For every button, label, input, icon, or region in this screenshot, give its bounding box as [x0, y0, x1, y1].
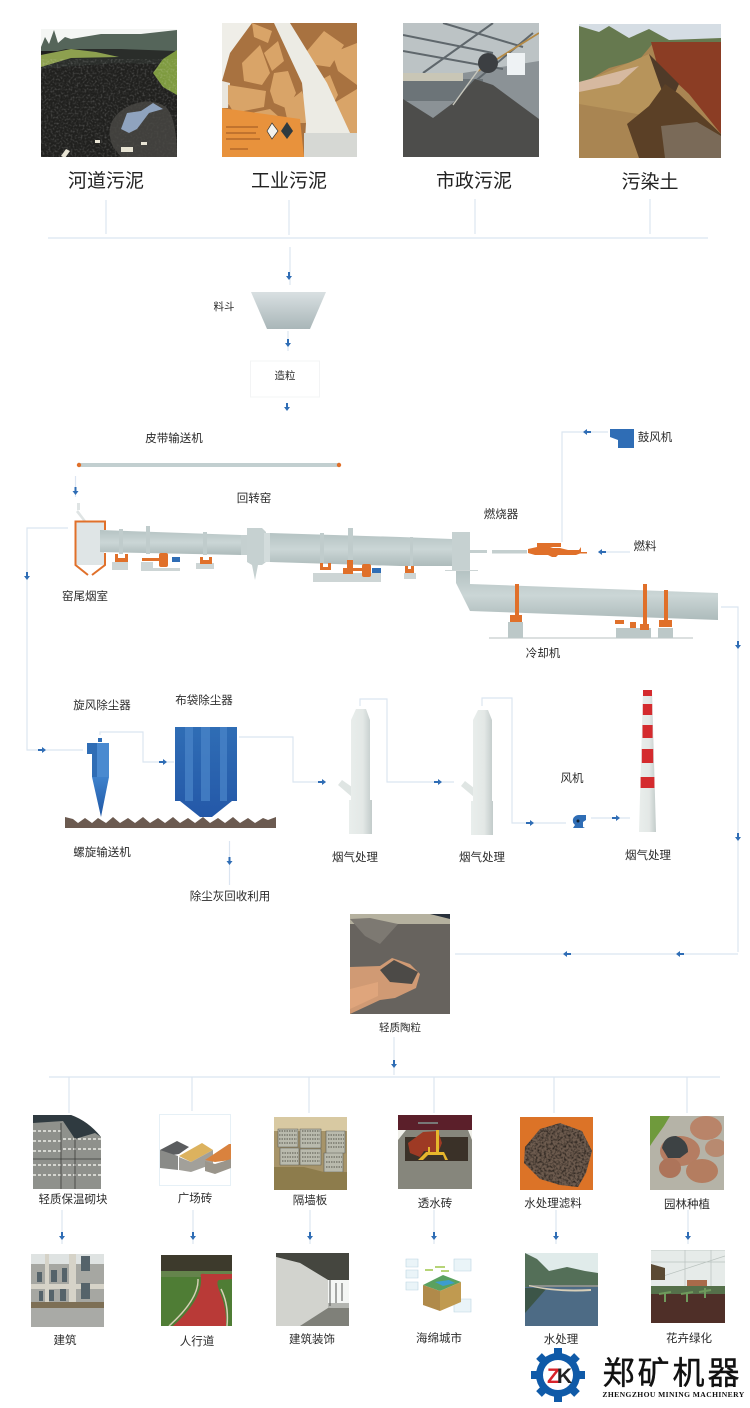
label: screw conveyor: 螺旋输送机	[73, 845, 131, 859]
connector: tower 1 to tower 2	[360, 699, 454, 785]
label: flue gas treatment 2: 烟气处理	[459, 850, 505, 864]
label: flue gas treatment 3: 烟气处理	[625, 848, 671, 862]
icon: gear with ZK	[531, 1348, 585, 1402]
label: insulation block: 轻质保温砌块	[38, 1192, 108, 1206]
label: bag filter: 布袋除尘器	[175, 693, 233, 707]
blower	[610, 429, 634, 448]
english wordmark: ZHENGZHOU MINING MACHINERY	[602, 1390, 745, 1399]
rotary kiln	[100, 526, 470, 582]
label: rotary kiln: 回转窑	[237, 491, 271, 505]
photo: building	[31, 1254, 104, 1327]
granulator box: 造粒	[274, 369, 296, 382]
label: filter media: 水处理滤料	[524, 1196, 582, 1210]
screw conveyor	[65, 817, 276, 828]
connector: smoke chamber to cyclone	[24, 528, 83, 753]
label: building decoration: 建筑装饰	[289, 1332, 335, 1346]
photo: lightweight ceramsite	[350, 914, 450, 1014]
belt conveyor	[77, 463, 341, 467]
label: cyclone dust collector: 旋风除尘器	[73, 698, 131, 712]
diagram: sponge city	[406, 1258, 472, 1312]
label: permeable brick: 透水砖	[418, 1196, 453, 1210]
photo: river sludge	[41, 29, 177, 157]
arrow: fuel to burner	[598, 549, 630, 555]
label: sidewalk: 人行道	[180, 1334, 215, 1348]
burner	[470, 543, 587, 557]
label: sponge city: 海绵城市	[416, 1331, 462, 1345]
photo: insulation block	[33, 1115, 101, 1189]
label: fan: 风机	[560, 771, 584, 785]
connector: fan to chimney	[591, 815, 630, 821]
wordmark: 郑矿机器	[602, 1355, 743, 1391]
label: dust recycling: 除尘灰回收利用	[190, 889, 270, 903]
cyclone dust collector	[87, 738, 109, 817]
label: lightweight ceramsite: 轻质陶粒	[379, 1021, 421, 1034]
flue gas tower 1	[338, 709, 372, 834]
label: water treatment: 水处理	[544, 1333, 579, 1346]
kiln supports	[112, 553, 416, 582]
photo: industrial sludge	[222, 23, 357, 157]
panel: raw materials	[41, 23, 721, 193]
granulator box	[250, 361, 320, 397]
label: blower: 鼓风机	[638, 430, 673, 444]
hopper	[251, 292, 326, 329]
label: cooler: 冷却机	[526, 646, 561, 660]
photo: sidewalk	[161, 1255, 232, 1326]
photo: flower greening	[651, 1250, 725, 1323]
photo: water treatment filter media	[520, 1117, 593, 1190]
label: municipal sludge: 市政污泥	[436, 170, 512, 192]
connector: bag filter to scrubber	[239, 737, 326, 785]
bag filter	[175, 727, 237, 817]
label: landscape planting: 园林种植	[664, 1197, 710, 1211]
chimney	[639, 690, 656, 832]
photo: landscape planting	[650, 1116, 724, 1190]
label: river sludge: 河道污泥	[68, 170, 144, 192]
label: industrial sludge: 工业污泥	[251, 170, 327, 192]
label: plaza brick: 广场砖	[178, 1191, 213, 1205]
photo: municipal sludge	[403, 23, 539, 157]
label: kiln tail smoke chamber: 窑尾烟室	[62, 589, 108, 603]
connector: products distribution	[49, 1037, 720, 1244]
label: contaminated soil: 污染土	[621, 171, 679, 193]
photo: partition board	[274, 1117, 347, 1190]
connector: cooler to product	[455, 607, 741, 957]
flue gas tower 2	[461, 710, 493, 835]
fan	[573, 815, 586, 828]
label: flower greening: 花卉绿化	[666, 1331, 712, 1345]
connector: cyclone to bag filter	[100, 732, 174, 765]
kiln tail smoke chamber	[76, 503, 105, 575]
logo	[531, 1348, 745, 1402]
label: building: 建筑	[54, 1333, 77, 1347]
label: belt conveyor: 皮带输送机	[145, 431, 203, 445]
label: flue gas treatment 1: 烟气处理	[332, 850, 378, 864]
photo: permeable brick	[398, 1115, 472, 1189]
photo: plaza brick	[159, 1114, 231, 1186]
row: products	[33, 1114, 727, 1211]
label: burner: 燃烧器	[484, 507, 519, 521]
label: partition board: 隔墙板	[293, 1193, 328, 1207]
photo: building decoration	[276, 1253, 349, 1326]
arrow: dust recycling	[226, 841, 232, 885]
icon: gear with ZK: ZK	[547, 1365, 572, 1388]
connector: raw materials to hopper	[48, 199, 708, 411]
label: hopper: 料斗	[214, 300, 234, 313]
photo: water treatment	[525, 1253, 598, 1326]
photo: contaminated soil	[579, 24, 721, 158]
arrow: belt to kiln tail	[72, 476, 78, 497]
connector: blower to burner	[562, 429, 608, 542]
row: applications	[31, 1250, 725, 1348]
cooler	[445, 570, 718, 638]
label: fuel: 燃料	[634, 539, 657, 553]
connector: tower 2 to fan	[482, 698, 566, 826]
